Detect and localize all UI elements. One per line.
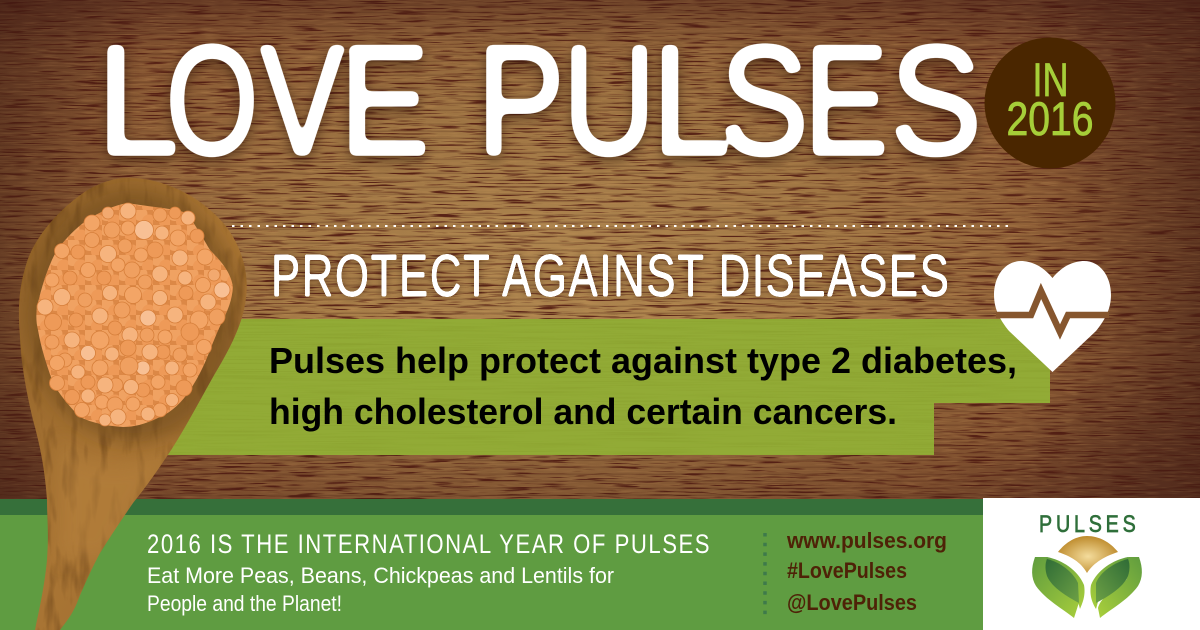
icon: heart with pulse line: [994, 261, 1111, 372]
logo wordmark: PULSES: [1039, 510, 1136, 537]
title: L: [97, 14, 179, 188]
heading: protect against diseases: PROTECT AGAINST DISEASES: [271, 243, 949, 309]
badge: in 2016: [984, 38, 1116, 168]
wooden spoon: [10, 170, 255, 630]
red lentils: [36, 203, 233, 427]
footer headline and message: [147, 530, 710, 616]
title: L: [652, 14, 730, 188]
banner message: [269, 340, 1017, 432]
banner message: high cholesterol and certain cancers.: [269, 391, 897, 432]
footer headline and message: People and the Planet!: [147, 591, 342, 616]
title: P: [477, 13, 564, 188]
footer headline and message: 2016 IS THE INTERNATIONAL YEAR OF PULSES: [147, 530, 710, 560]
logo mark: sun and leaves: [1032, 536, 1142, 618]
footer links: www.pulses.org: [786, 528, 947, 553]
footer headline and message: Eat More Peas, Beans, Chickpeas and Lentils for: [147, 563, 614, 588]
banner message: Pulses help protect against type 2 diabetes,: [269, 340, 1017, 381]
title: S: [720, 13, 808, 187]
footer links: [786, 528, 947, 615]
title: U: [563, 14, 655, 188]
title: E: [340, 12, 429, 187]
badge: in 2016: IN: [1032, 53, 1068, 106]
footer links: @LovePulses: [787, 590, 917, 615]
spoon with lentils: [10, 170, 255, 630]
title: S: [890, 14, 982, 188]
footer links: #LovePulses: [787, 558, 907, 583]
footer band: [0, 499, 983, 630]
title: V: [260, 13, 345, 188]
badge: in 2016: 2016: [1006, 92, 1094, 145]
title: [97, 12, 982, 188]
logo panel: [983, 498, 1200, 630]
title: O: [166, 14, 258, 188]
title: E: [804, 13, 888, 188]
green banner: [150, 319, 1050, 455]
